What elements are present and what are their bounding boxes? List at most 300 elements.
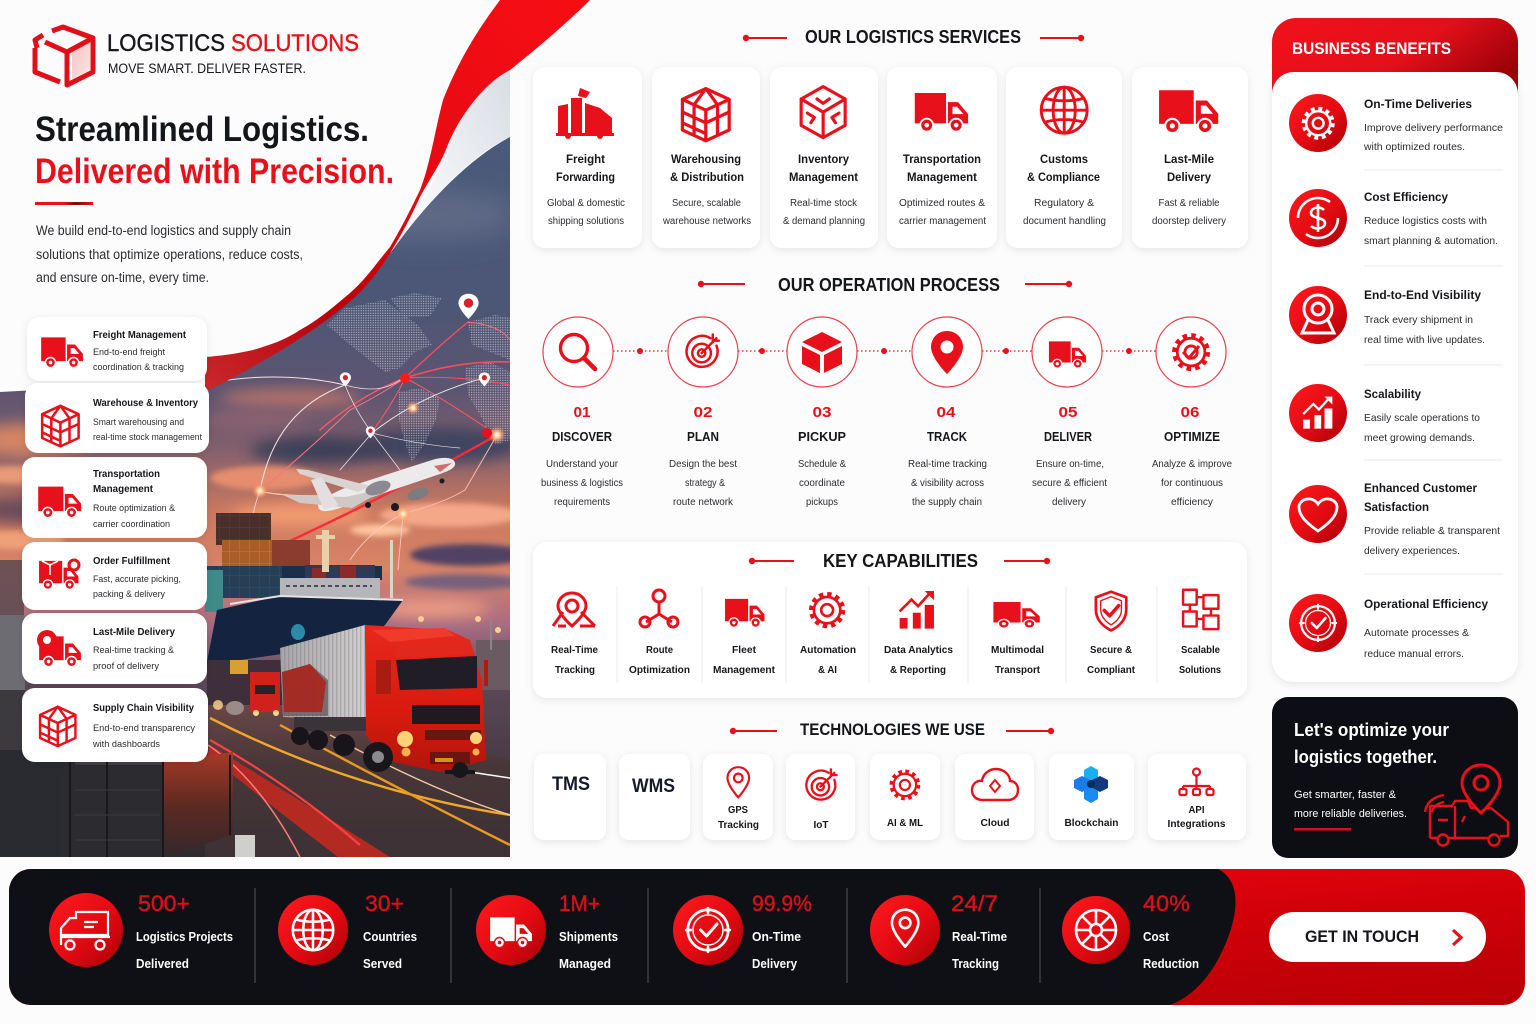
side card: warehouse and inventory <box>25 383 209 453</box>
service card: last-mile delivery <box>1132 67 1248 248</box>
label <box>1087 644 1135 676</box>
step text: strategy & <box>685 478 725 489</box>
card text: End-to-end transparency <box>93 723 196 733</box>
icon: cost wheel <box>1076 910 1116 950</box>
card text: Supply Chain Visibility <box>93 702 194 714</box>
card text: carrier coordination <box>93 519 170 529</box>
tech card: blockchain <box>1049 754 1134 840</box>
step text <box>908 404 987 508</box>
main heading <box>35 110 394 191</box>
card text: Smart warehousing and <box>93 417 184 427</box>
stat text: 24/7 <box>951 891 998 916</box>
tech card: AI and ML <box>870 754 940 840</box>
benefit text: smart planning & automation. <box>1364 235 1498 247</box>
service text: Customs <box>1040 152 1088 166</box>
icon: truck with pin <box>37 630 81 667</box>
stat text: Countries <box>363 929 417 944</box>
stat: 30+ countries <box>278 891 417 971</box>
road with light trails <box>205 705 510 857</box>
step text: 02 <box>694 404 712 421</box>
icon: truck with location pin <box>1425 765 1508 846</box>
side card: order fulfillment <box>22 542 207 610</box>
benefit text <box>1364 481 1500 557</box>
stat text: Logistics Projects <box>136 929 233 944</box>
stat: 24/7 tracking <box>870 891 1007 971</box>
stat text: Served <box>363 956 402 971</box>
tech card: TMS <box>534 754 606 840</box>
step text <box>798 404 846 508</box>
icon: warehouse <box>682 89 729 141</box>
capability: scalable solutions <box>1179 590 1221 676</box>
icon: globe <box>293 910 333 950</box>
step text: PLAN <box>687 430 719 444</box>
tech card: WMS <box>619 754 690 840</box>
benefit text: Provide reliable & transparent <box>1364 525 1500 537</box>
distant red truck <box>213 672 280 716</box>
card text <box>93 555 181 599</box>
step text: pickups <box>806 497 838 508</box>
step text: delivery <box>1052 497 1086 508</box>
cargo ship <box>207 530 403 662</box>
label: Real-Time <box>551 644 598 656</box>
service text: Secure, scalable <box>672 198 741 209</box>
icon: delivery truck <box>1049 341 1086 368</box>
heading: key capabilities: KEY CAPABILITIES <box>823 551 978 571</box>
service text: & demand planning <box>783 216 865 227</box>
service text: document handling <box>1023 216 1106 227</box>
service text <box>899 152 986 227</box>
benefit text <box>1364 190 1498 247</box>
icon: container truck <box>993 602 1040 628</box>
icon: location pin <box>931 331 963 374</box>
tech card: cloud <box>955 754 1034 840</box>
card text <box>93 626 175 671</box>
step text: PICKUP <box>798 430 846 444</box>
panel: call to action <box>1272 697 1518 858</box>
label: & AI <box>818 664 837 676</box>
stat text: 30+ <box>365 891 404 916</box>
label: Multimodal <box>991 644 1044 656</box>
step text: OPTIMIZE <box>1164 430 1220 444</box>
card text <box>93 329 186 372</box>
step 02 plan <box>668 317 738 508</box>
icon: connected blocks <box>1183 590 1218 629</box>
icon: fleet truck <box>725 599 764 627</box>
service text: Last-Mile <box>1164 152 1214 166</box>
card text: Freight Management <box>93 329 186 341</box>
stat: 500+ projects <box>49 891 233 971</box>
stat text: Cost <box>1143 929 1170 944</box>
icon: target <box>806 769 837 800</box>
benefit text: Track every shipment in <box>1364 314 1473 326</box>
service text: carrier management <box>899 216 986 227</box>
stat text <box>559 891 618 971</box>
icon: dollar cycle <box>1298 198 1338 238</box>
label: Optimization <box>629 664 690 676</box>
step text: business & logistics <box>541 478 623 489</box>
icon: blue blocks <box>1074 766 1108 803</box>
step text <box>1032 404 1107 508</box>
hero panel: logistics photo collage <box>0 0 590 860</box>
icon: van <box>61 912 110 950</box>
benefit text: real time with live updates. <box>1364 334 1485 346</box>
step text: coordinate <box>799 478 845 489</box>
icon: gear <box>811 594 843 626</box>
stat text: 500+ <box>138 891 190 916</box>
step 01 discover <box>541 317 623 508</box>
icon: truck <box>41 337 83 368</box>
icon: parcel van <box>39 560 79 589</box>
label: Integrations <box>1168 819 1226 830</box>
icon: clock check <box>1300 605 1336 641</box>
service text: Regulatory & <box>1034 198 1094 209</box>
capability: real-time tracking <box>551 593 598 676</box>
card text: packing & delivery <box>93 589 165 599</box>
brand name: LOGISTICS <box>107 30 225 57</box>
step text: efficiency <box>1171 497 1213 508</box>
card text: Fast, accurate picking, <box>93 574 181 584</box>
benefit text: Easily scale operations to <box>1364 412 1480 424</box>
panel: key capabilities <box>533 542 1247 698</box>
icon: clock <box>686 908 730 952</box>
label: Scalable <box>1181 644 1220 656</box>
service text <box>1023 152 1106 227</box>
main heading: Delivered with Precision. <box>35 152 394 191</box>
step text: TRACK <box>927 430 967 444</box>
panel: business benefits <box>1272 18 1518 682</box>
side card: supply chain visibility <box>22 688 208 762</box>
icon: gear check <box>1175 336 1208 369</box>
heading: key capabilities <box>749 551 1050 571</box>
step text: secure & efficient <box>1032 478 1107 489</box>
icon: globe <box>1041 87 1087 133</box>
stat text: Managed <box>559 956 611 971</box>
step text: Schedule & <box>798 459 846 470</box>
step text <box>1152 404 1232 508</box>
stat text: Reduction <box>1143 956 1199 971</box>
icon: cloud <box>972 769 1018 800</box>
service text <box>1152 152 1226 227</box>
label <box>629 644 690 676</box>
service text: Delivery <box>1167 170 1211 184</box>
tech card: GPS tracking <box>703 754 773 840</box>
clouds <box>0 191 530 617</box>
heading: our logistics services <box>743 27 1084 47</box>
service text: Global & domestic <box>547 198 625 209</box>
step text: for continuous <box>1161 478 1223 489</box>
service text: doorstep delivery <box>1152 216 1226 227</box>
step text: Understand your <box>546 459 619 470</box>
stat: 99.9% on-time <box>673 891 812 971</box>
benefit: scalability <box>1289 384 1480 444</box>
bottom stats bar <box>9 869 1525 1005</box>
heading underline <box>35 202 93 205</box>
icon: package <box>802 332 842 373</box>
label: Compliant <box>1087 664 1135 676</box>
label <box>718 805 759 831</box>
label: API <box>1188 805 1205 816</box>
icon: location pin <box>892 910 918 947</box>
label: Secure & <box>1090 644 1132 656</box>
benefit text: Scalability <box>1364 387 1421 401</box>
cta heading: logistics together. <box>1294 746 1437 767</box>
label: AI & ML <box>887 818 923 829</box>
benefit text: Cost Efficiency <box>1364 190 1448 204</box>
service text <box>662 152 751 227</box>
step text: DISCOVER <box>552 430 612 444</box>
label <box>884 644 953 676</box>
service text: Transportation <box>903 152 981 166</box>
benefit: on-time deliveries <box>1289 94 1503 153</box>
heading: our operation process <box>698 275 1072 295</box>
intro paragraph: solutions that optimize operations, reduce costs, <box>36 247 303 262</box>
card text <box>93 397 202 442</box>
world map dots <box>327 293 510 462</box>
stat text: Tracking <box>952 956 999 971</box>
label: Cloud <box>980 818 1010 829</box>
stat text <box>363 891 417 971</box>
side card: freight management <box>27 317 207 381</box>
stat text: 99.9% <box>752 891 812 916</box>
label: Tracking <box>555 664 595 676</box>
icon: ai gear <box>891 771 918 798</box>
stat text <box>1143 891 1199 971</box>
card text: real-time stock management <box>93 432 202 442</box>
service text: shipping solutions <box>548 216 624 227</box>
label: Route <box>646 644 673 656</box>
stat: 1M+ shipments <box>476 891 618 971</box>
label: GPS <box>728 805 748 816</box>
cta text: Get smarter, faster & <box>1294 789 1397 801</box>
step text: 01 <box>574 404 590 421</box>
label: IoT <box>814 820 828 831</box>
card text: proof of delivery <box>93 661 160 671</box>
icon: warehouse grid <box>40 707 75 746</box>
step 06 optimize <box>1152 317 1232 508</box>
card text: Route optimization & <box>93 503 175 513</box>
icon: chevron <box>1453 930 1461 945</box>
benefit text: Reduce logistics costs with <box>1364 215 1487 227</box>
benefit text: delivery experiences. <box>1364 545 1460 557</box>
stat text: Delivered <box>136 956 189 971</box>
icon: delivery truck <box>38 487 81 518</box>
step text: Design the best <box>669 459 737 470</box>
step 03 pickup <box>787 317 857 508</box>
cta heading: Let's optimize your <box>1294 719 1449 740</box>
heading: technologies we use: TECHNOLOGIES WE USE <box>800 721 985 739</box>
card text: Real-time tracking & <box>93 645 174 655</box>
process connectors <box>613 348 1156 354</box>
step text: Real-time tracking <box>908 459 987 470</box>
tech card: WMS: WMS <box>632 776 675 797</box>
label <box>800 644 856 676</box>
benefit text: On-Time Deliveries <box>1364 97 1472 111</box>
capability: automation and AI <box>800 594 856 676</box>
card text: with dashboards <box>92 739 161 749</box>
step 04 track <box>908 317 987 508</box>
service text: warehouse networks <box>662 216 751 227</box>
step text <box>541 404 623 508</box>
benefit text <box>1364 288 1485 346</box>
label: Tracking <box>718 820 759 831</box>
icon: heart handshake <box>1299 499 1337 531</box>
icon: warehouse <box>42 406 79 446</box>
stat text <box>951 891 1007 971</box>
card text <box>93 468 175 529</box>
benefit text: Operational Efficiency <box>1364 597 1488 611</box>
service text: Management <box>789 170 858 184</box>
benefit text: Improve delivery performance <box>1364 122 1503 134</box>
brand name: SOLUTIONS <box>231 30 359 57</box>
label <box>1179 644 1221 676</box>
icon: freight truck <box>556 88 614 139</box>
icon: delivery truck <box>1159 90 1218 133</box>
label <box>713 644 775 676</box>
benefit text: reduce manual errors. <box>1364 648 1464 660</box>
cta accent line <box>1294 828 1351 830</box>
capability: multimodal transport <box>991 602 1044 676</box>
benefit text: Satisfaction <box>1364 500 1429 514</box>
intro paragraph: We build end-to-end logistics and supply chain <box>36 223 291 238</box>
label: Fleet <box>732 644 756 656</box>
map pins <box>340 294 490 438</box>
tech card: TMS: TMS <box>552 774 590 795</box>
icon: growth chart <box>1303 397 1332 429</box>
icon: gps pin <box>727 767 749 797</box>
icon: bar chart <box>900 591 934 629</box>
capability: fleet management <box>713 599 775 676</box>
intro paragraph: and ensure on-time, every time. <box>36 270 209 285</box>
step text: 05 <box>1058 404 1078 421</box>
stat text: 40% <box>1143 891 1190 916</box>
benefits header: BUSINESS BENEFITS <box>1292 40 1451 58</box>
benefit text <box>1363 97 1503 153</box>
side card: last-mile delivery <box>22 613 207 684</box>
capability: data analytics <box>884 591 953 676</box>
network route lines <box>228 322 510 570</box>
red ribbon swoosh <box>205 0 590 392</box>
step text: DELIVER <box>1044 430 1092 444</box>
label: Data Analytics <box>884 644 953 656</box>
airplane <box>283 458 455 511</box>
service text <box>783 152 865 227</box>
benefit: cost efficiency <box>1289 189 1498 247</box>
service text: Freight <box>566 152 605 166</box>
tagline: MOVE SMART. DELIVER FASTER. <box>108 61 306 76</box>
button: get in touch: GET IN TOUCH <box>1305 928 1419 946</box>
heading: technologies we use <box>730 721 1054 739</box>
stat: 40% reduction <box>1062 891 1199 971</box>
distant port <box>0 560 510 760</box>
icon: api tree <box>1180 768 1214 795</box>
card text: Order Fulfillment <box>93 555 170 567</box>
benefit text: End-to-End Visibility <box>1364 288 1481 302</box>
label: Blockchain <box>1064 818 1118 829</box>
label: Management <box>713 664 775 676</box>
service text: Optimized routes & <box>899 198 985 209</box>
service text: Inventory <box>798 152 849 166</box>
icon: route nodes <box>640 590 678 627</box>
service card: transportation <box>887 67 997 248</box>
label <box>991 644 1044 676</box>
capability: route optimization <box>629 590 690 676</box>
main heading: Streamlined Logistics. <box>35 110 369 149</box>
icon: truck <box>490 917 532 948</box>
stat text: Delivery <box>752 956 798 971</box>
step 05 deliver <box>1032 317 1107 508</box>
label <box>551 644 598 676</box>
red truck <box>280 625 488 778</box>
service card: warehousing <box>652 67 760 248</box>
stat text <box>752 891 812 971</box>
service card: customs <box>1006 67 1122 248</box>
intro paragraph <box>36 223 303 285</box>
brand name <box>107 30 359 57</box>
step text: 03 <box>812 404 832 421</box>
service text: Management <box>907 170 977 184</box>
step text: route network <box>673 497 734 508</box>
step text: requirements <box>554 497 610 508</box>
service text <box>547 152 625 227</box>
containers <box>205 513 382 612</box>
stat text <box>136 891 233 971</box>
service card: freight forwarding <box>533 67 642 248</box>
icon: cube <box>801 87 845 138</box>
heading: our logistics services: OUR LOGISTICS SERVICES <box>805 27 1021 47</box>
step text: 04 <box>936 404 956 421</box>
icon: shield <box>1096 592 1126 630</box>
card text: Management <box>93 483 153 495</box>
capability: secure and compliant <box>1087 592 1135 676</box>
card text: End-to-end freight <box>93 347 165 357</box>
dark foreground containers <box>0 750 255 857</box>
service text: & Compliance <box>1027 170 1100 184</box>
label: Solutions <box>1179 664 1221 676</box>
label <box>1168 805 1226 830</box>
benefit text <box>1364 597 1488 660</box>
cta heading <box>1294 719 1449 767</box>
service text: Warehousing <box>671 152 741 166</box>
heading: our operation process: OUR OPERATION PROCESS <box>778 275 1000 295</box>
label: Automation <box>800 644 856 656</box>
stat text: On-Time <box>752 929 801 944</box>
service text: & Distribution <box>670 170 744 184</box>
benefits header <box>1272 18 1518 110</box>
service text: Forwarding <box>556 170 615 184</box>
step text: 06 <box>1180 404 1200 421</box>
stat text: 1M+ <box>559 891 600 916</box>
side card: transportation management <box>22 457 207 538</box>
label: & Reporting <box>890 664 946 676</box>
card text <box>92 702 196 749</box>
benefit text: Automate processes & <box>1364 627 1469 639</box>
benefit: customer satisfaction <box>1289 481 1500 557</box>
benefit text: meet growing demands. <box>1364 432 1475 444</box>
card text: Transportation <box>93 468 160 480</box>
card text: coordination & tracking <box>93 362 184 372</box>
card text: Last-Mile Delivery <box>93 626 175 638</box>
stat text: Real-Time <box>952 929 1007 944</box>
cta text: more reliable deliveries. <box>1294 808 1407 820</box>
glow nodes <box>253 373 506 540</box>
cta text <box>1294 789 1407 820</box>
step text: Ensure on-time, <box>1036 459 1104 470</box>
brand logo icon <box>35 27 93 85</box>
benefit: operational efficiency <box>1289 594 1488 660</box>
icon: gear <box>1304 109 1333 138</box>
benefit text: with optimized routes. <box>1363 141 1465 153</box>
tech card: IoT <box>786 754 855 840</box>
